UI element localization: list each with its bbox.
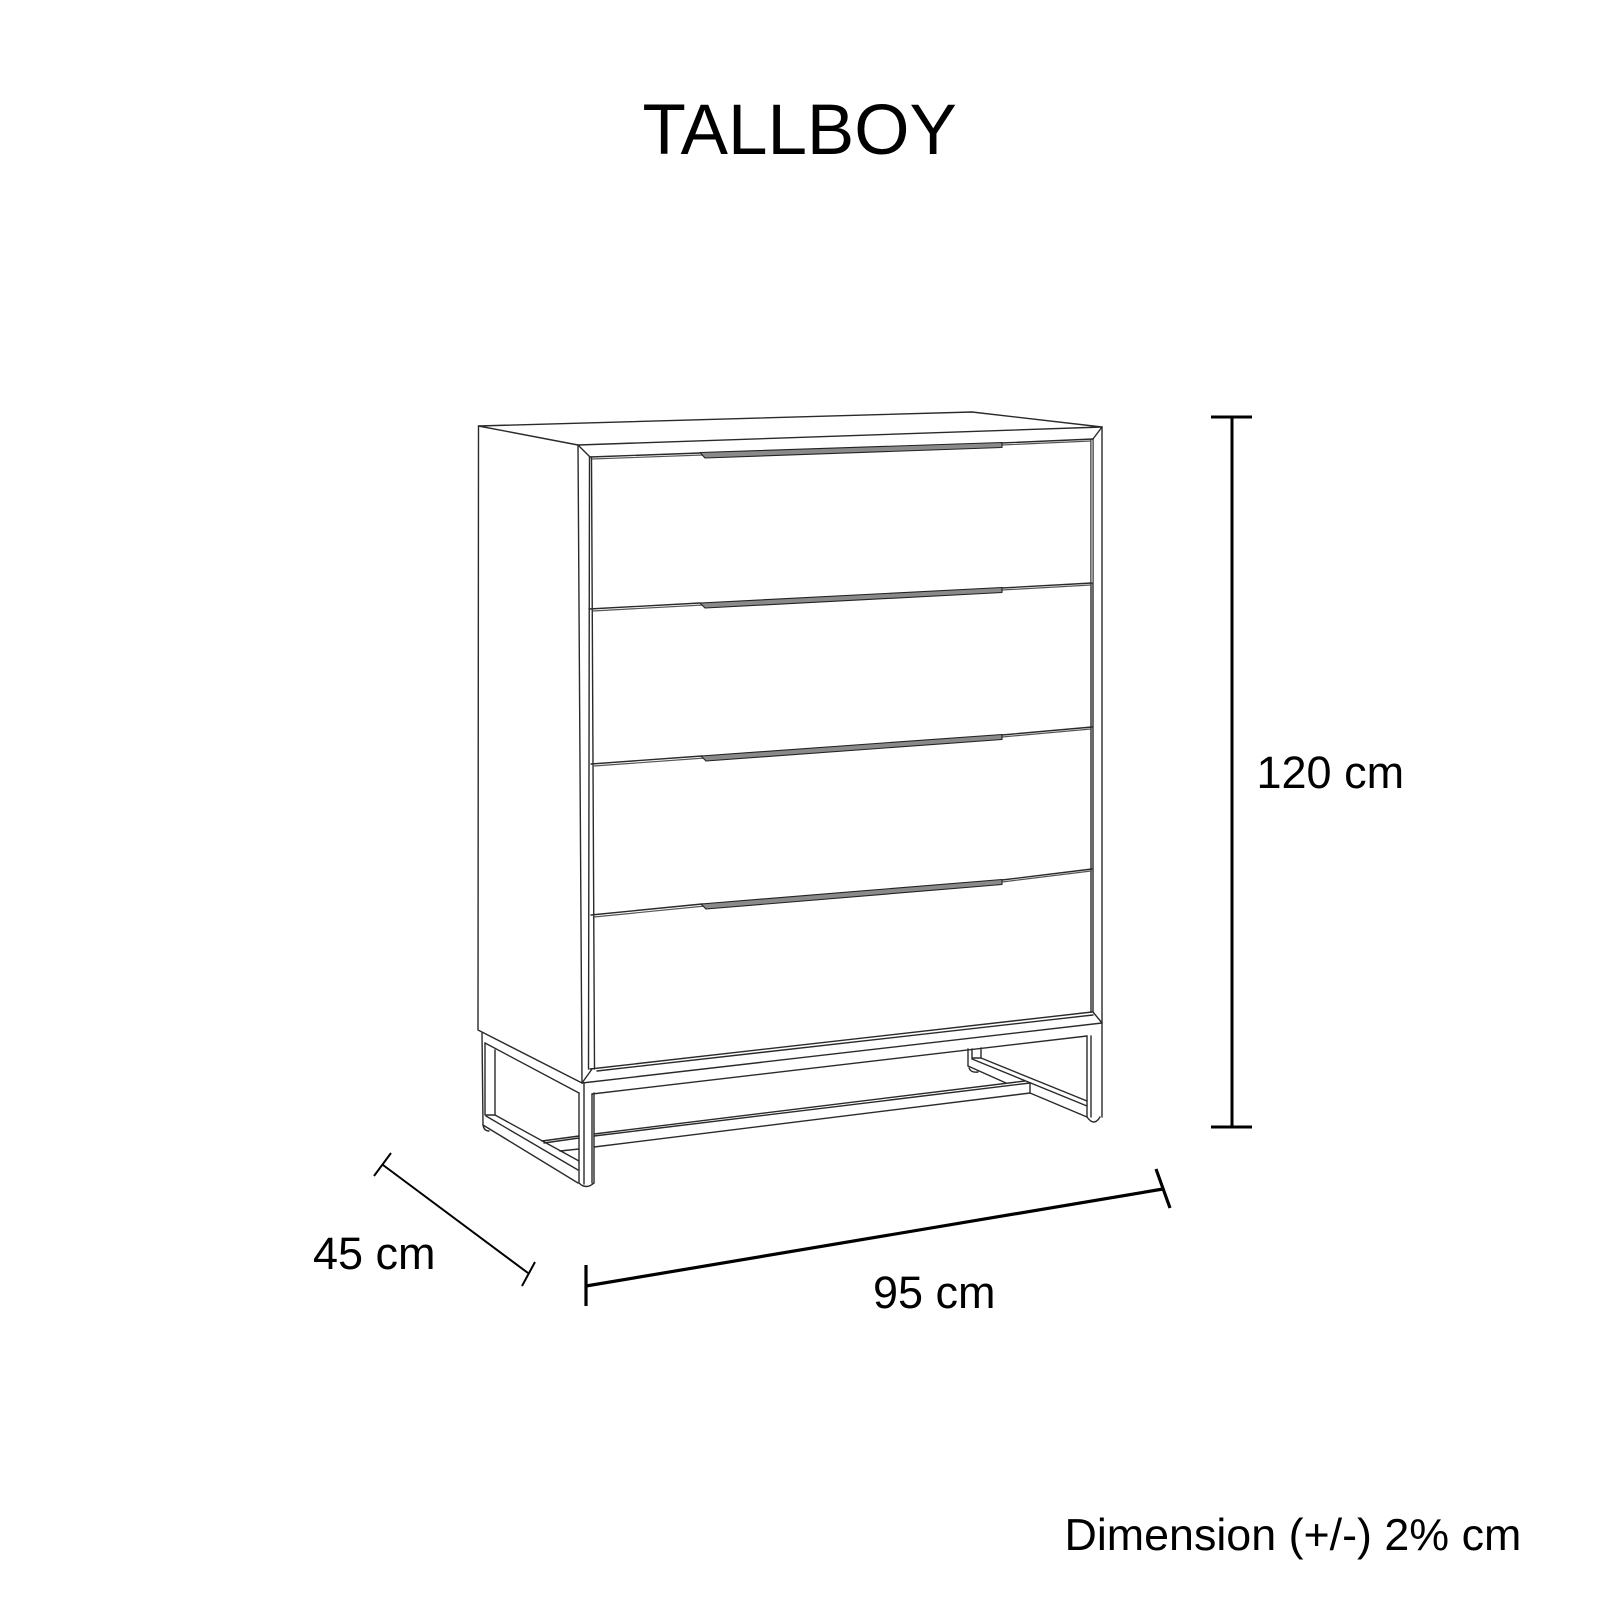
left side rails	[483, 1043, 592, 1183]
back left leg	[482, 1033, 495, 1131]
top front rail	[592, 1036, 1087, 1094]
metal frame base	[482, 1023, 1102, 1186]
cabinet body	[478, 412, 1102, 1083]
height label: 120 cm	[1256, 747, 1404, 798]
width dimension line	[586, 1169, 1170, 1306]
right side rails	[968, 1058, 1087, 1117]
tolerance note: Dimension (+/-) 2% cm	[1064, 1510, 1521, 1560]
drawer 3	[591, 727, 1092, 766]
drawer 1	[590, 439, 1093, 459]
depth dimension line	[374, 1153, 535, 1286]
front right leg	[1087, 1023, 1102, 1122]
right door edge	[1091, 439, 1093, 1012]
height dimension line	[1211, 417, 1252, 1127]
front left leg	[579, 1083, 594, 1186]
drawer 1 handle	[700, 442, 1002, 458]
depth label: 45 cm	[313, 1228, 436, 1279]
tallboy line drawing	[478, 412, 1102, 1186]
drawer 2 handle	[700, 588, 1002, 608]
back right leg	[968, 1048, 981, 1072]
drawer 3 handle	[701, 734, 1002, 761]
centre stretcher	[542, 1081, 1030, 1151]
drawer bottom edge	[590, 1012, 1093, 1071]
title: TALLBOY	[642, 91, 957, 170]
drawer 2	[589, 583, 1092, 611]
drawer 4 handle	[701, 880, 1002, 909]
width label: 95 cm	[873, 1267, 996, 1318]
drawer 4	[591, 869, 1092, 917]
